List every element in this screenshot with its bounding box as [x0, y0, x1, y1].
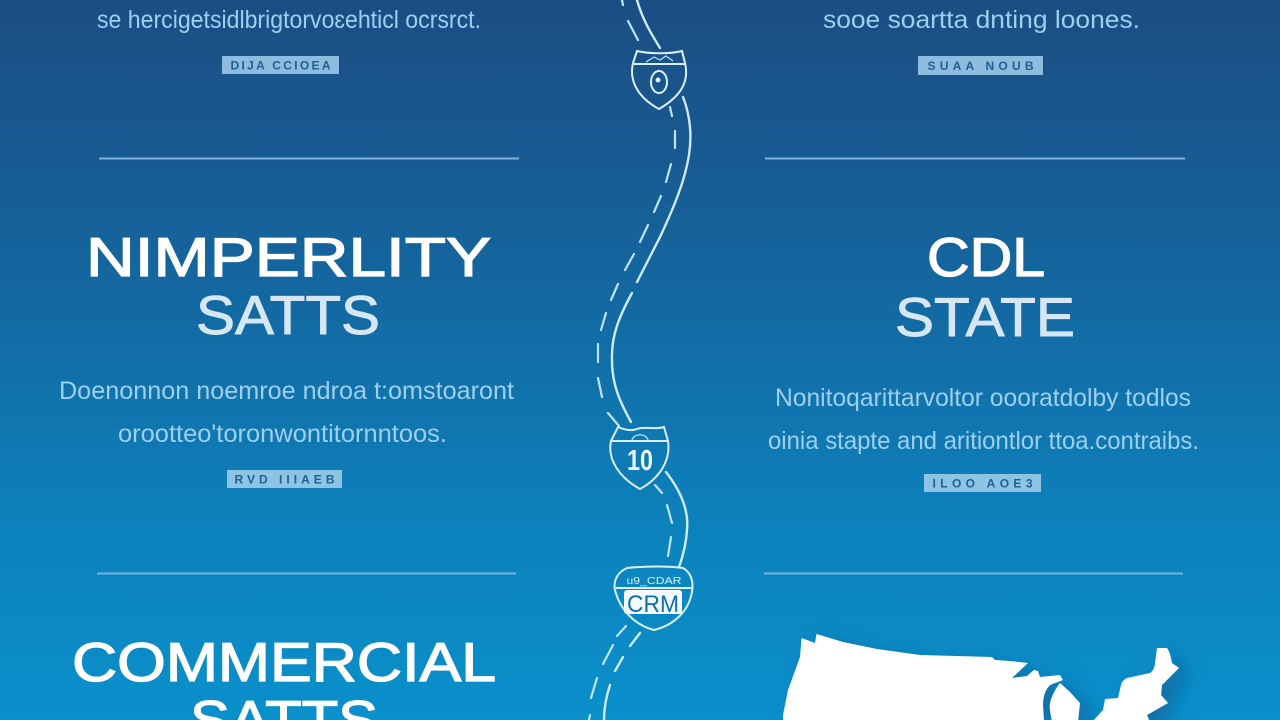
tag: middle left: RVD IIIAEB [234, 472, 335, 486]
panel: middle left block [59, 226, 514, 488]
tag: middle right [924, 474, 1041, 492]
US map silhouette [783, 634, 1179, 720]
icon: highway shield 3 [615, 566, 693, 630]
body text: middle left: orootteo'toronwontitornntoos. [118, 420, 447, 448]
heading: Nimperlity Satts [86, 226, 491, 346]
panel: top right block [823, 6, 1140, 75]
tag: top right [918, 56, 1043, 75]
tag: top left [222, 56, 339, 74]
heading: CDL State: STATE [895, 286, 1075, 348]
body text: top right: sooe soartta dnting loones. [823, 6, 1140, 34]
body text: middle right: Nonitoqarittarvoltor oooratdolby todlos [775, 384, 1191, 412]
body text: middle right [768, 384, 1199, 455]
tag: top left: DIJA CCIOEA [230, 58, 331, 72]
shield plate text: CRM [627, 591, 679, 618]
heading: Commercial Satts [72, 631, 496, 720]
tag: middle left [227, 470, 342, 488]
heading: CDL State [895, 226, 1075, 348]
body text: middle left [59, 377, 514, 448]
heading: Nimperlity Satts: NIMPERLITY [86, 226, 491, 288]
body text: middle left: Doenonnon noemroe ndroa t:omstoaront [59, 377, 514, 405]
tag: top right: SUAA NOUB [928, 59, 1034, 73]
panel: middle right block [768, 226, 1199, 492]
winding road [589, 0, 693, 720]
road centre: dashed line [589, 0, 675, 720]
heading: Nimperlity Satts: SATTS [196, 284, 380, 346]
body text: top left: se hercigetsidlbrigtorvoɛehticl ocrsrct. [97, 6, 481, 34]
tag: middle right: ILOO AOE3 [932, 476, 1033, 490]
heading: Commercial Satts: COMMERCIAL [72, 631, 496, 693]
icon: highway shield 2 [610, 427, 668, 489]
icon: highway shield 1 [632, 51, 686, 109]
shield top text: u9_CDAR [626, 576, 682, 587]
road edge: solid line [604, 0, 690, 720]
panel: top left block [97, 6, 481, 74]
body text: middle right: oinia stapte and aritiontlor ttoa.contraibs. [768, 427, 1199, 455]
heading: CDL State: CDL [927, 226, 1045, 288]
shield number: 10 [627, 445, 653, 477]
shield plate [624, 590, 682, 614]
